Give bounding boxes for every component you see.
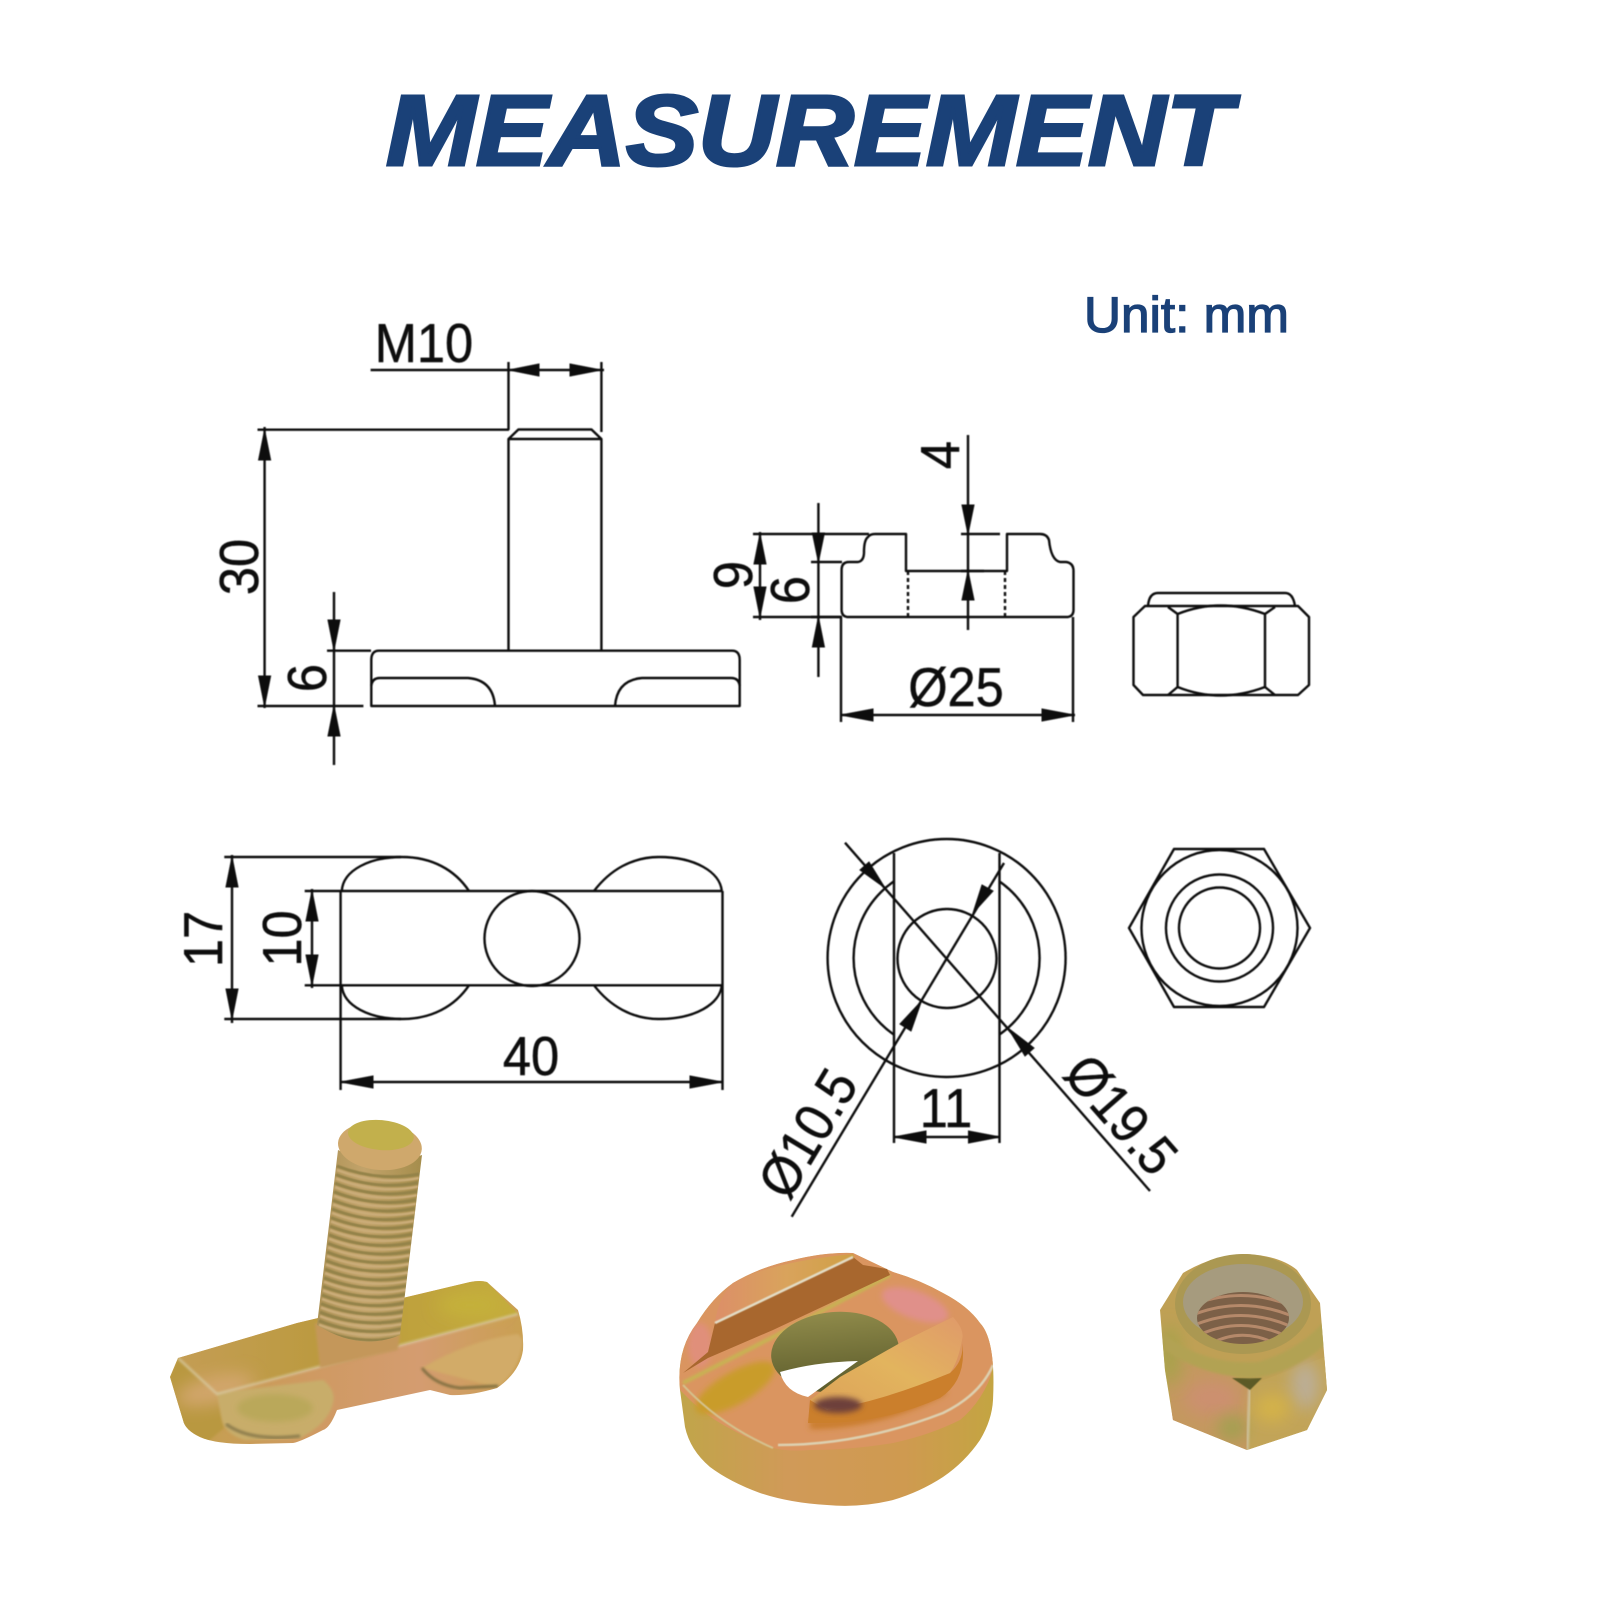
nut collar [1175, 1254, 1311, 1354]
drawing: lock nut side view [1134, 593, 1309, 696]
washer outline [842, 534, 1074, 617]
dimension: 4 [910, 435, 1000, 630]
bolt collar [315, 1323, 400, 1368]
photo: lock nut [1160, 1254, 1327, 1450]
infographic canvas [170, 94, 1327, 1506]
washer slot wall [683, 1257, 890, 1373]
dimension: M10: M10 [375, 313, 473, 374]
photo: T-bolt [165, 1116, 530, 1450]
dimension: diameter 25 [841, 617, 1075, 722]
dimension: M10 [371, 313, 604, 432]
title: MEASUREMENT [386, 75, 1241, 187]
dimension: 10: 10 [252, 910, 313, 967]
dimension: 30 [209, 427, 509, 708]
dimension: 6 [277, 592, 371, 765]
drawing: washer side view [703, 435, 1075, 722]
dimension: 17: 17 [173, 911, 234, 967]
unit note: Unit: mm [1084, 287, 1289, 343]
nut faces [1160, 1254, 1327, 1450]
dimension: diameter 19.5 [845, 843, 1189, 1191]
dimension: 9: 9 [703, 561, 764, 589]
dimension: diameter 10.5 [747, 863, 1004, 1217]
dimension: 11: 11 [920, 1078, 972, 1139]
bolt threaded shank [317, 1150, 422, 1342]
dimension: 4: 4 [910, 441, 971, 469]
dimension: 40: 40 [503, 1026, 559, 1087]
dimension: 10 [252, 889, 318, 988]
washer circles [828, 839, 1066, 1077]
drawing: T-bolt plan view [173, 855, 723, 1090]
washer body [679, 1252, 994, 1506]
dimension: diameter 10.5: Ø10.5 [747, 1059, 870, 1208]
dimension: 6: 6 [760, 576, 821, 604]
dimension: diameter 19.5: Ø19.5 [1052, 1043, 1189, 1187]
washer hole [768, 1307, 902, 1397]
dimension: 6: 6 [277, 664, 338, 692]
dimension: 6 [760, 503, 842, 677]
drawing: lock nut top view [1129, 849, 1310, 1007]
dimension: diameter 25: Ø25 [908, 657, 1004, 718]
drawing: washer plan view [747, 839, 1189, 1217]
nut thread hole [1195, 1292, 1292, 1345]
dimension: 17 [173, 855, 401, 1023]
washer raised crescent [808, 1317, 963, 1423]
washer raised lobe [715, 1254, 857, 1323]
nylon insert [1183, 1264, 1303, 1340]
bolt outline [371, 430, 740, 706]
bolt base [165, 1275, 530, 1450]
plan outline [305, 857, 722, 1019]
dimension: 9 [703, 532, 869, 620]
dimension: 30: 30 [209, 539, 270, 595]
washer top surface [679, 1253, 993, 1451]
photo: washer [679, 1252, 994, 1506]
bolt tip [336, 1116, 424, 1174]
dimension: 11 [894, 853, 1000, 1143]
dimension: 40 [341, 891, 723, 1090]
drawing: T-bolt side view [209, 313, 740, 765]
